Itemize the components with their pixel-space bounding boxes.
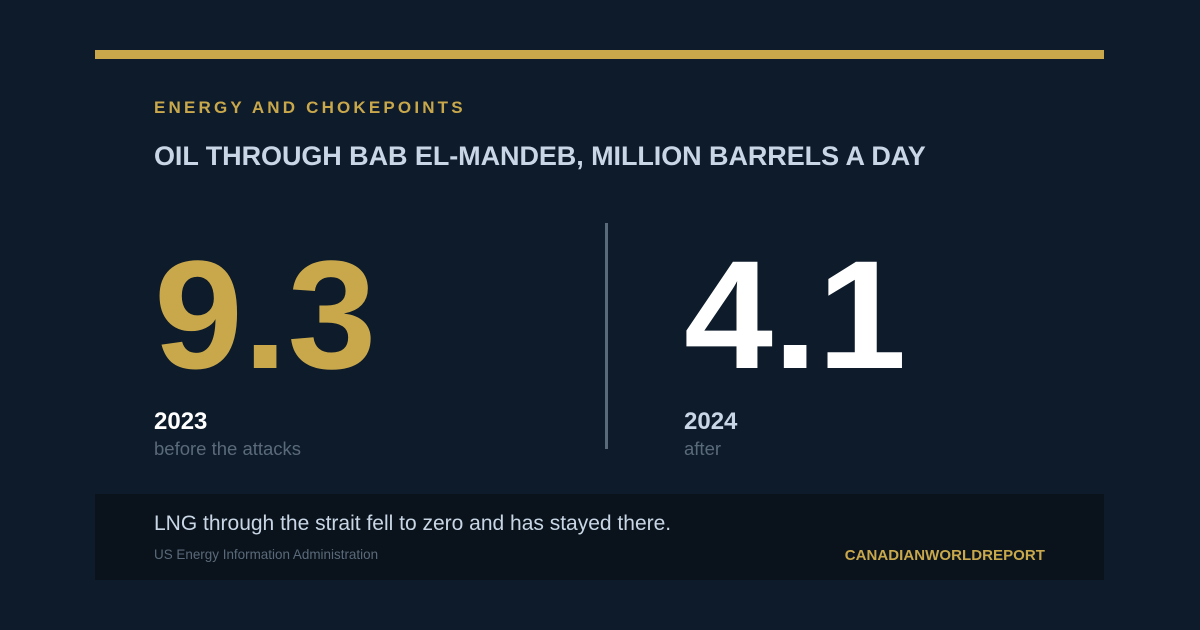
stat: 2023 (154, 228, 376, 459)
stat: 2024 (684, 228, 906, 459)
year 2024: 2024 (684, 408, 737, 435)
vertical divider (605, 223, 608, 449)
eyebrow heading: ENERGY AND CHOKEPOINTS (154, 98, 466, 117)
caption before the attacks: before the attacks (154, 438, 301, 459)
title: OIL THROUGH BAB EL-MANDEB, MILLION BARRELS A DAY (154, 141, 926, 171)
brand: CANADIANWORLDREPORT (845, 547, 1045, 564)
source: US Energy Information Administration (154, 547, 378, 562)
value 4.1: 4.1 (684, 228, 906, 400)
value 9.3: 9.3 (154, 228, 376, 400)
year 2023: 2023 (154, 408, 207, 435)
note on LNG: LNG through the strait fell to zero and has stayed there. (154, 512, 671, 535)
top accent bar (95, 50, 1104, 59)
footer band (95, 494, 1104, 580)
caption after: after (684, 438, 721, 459)
